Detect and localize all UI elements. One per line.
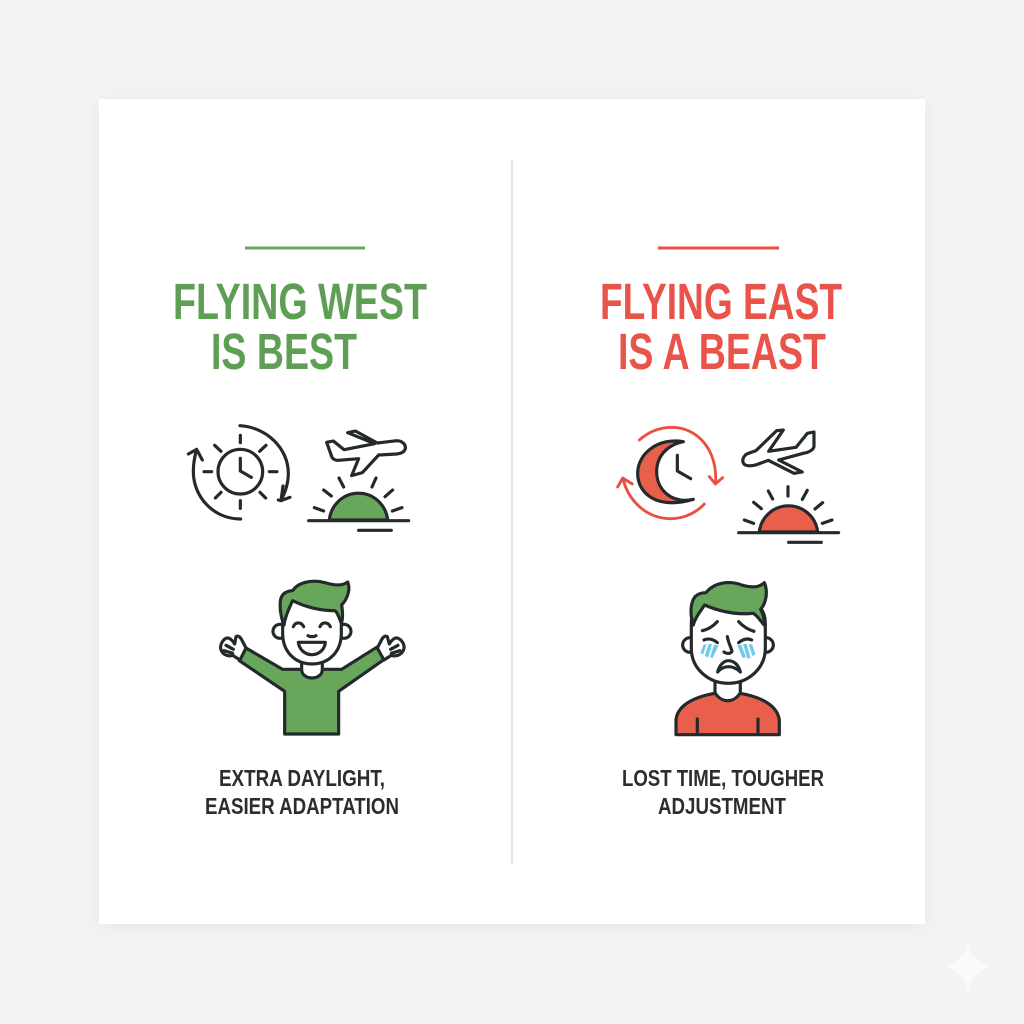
ears bbox=[683, 638, 697, 652]
red shirt bbox=[676, 693, 779, 735]
neck bbox=[715, 678, 740, 701]
hair bbox=[280, 581, 349, 625]
caption: extra daylight: EASIER ADAPTATION bbox=[205, 793, 399, 819]
caption: lost time bbox=[622, 765, 824, 819]
shirt and arms bbox=[239, 647, 384, 734]
card background bbox=[99, 99, 925, 924]
icon: red sun on horizon bbox=[739, 487, 839, 542]
frown bbox=[718, 661, 740, 672]
illustration: happy person with raised arms bbox=[221, 581, 404, 734]
panel: flying east bbox=[600, 246, 842, 819]
head bbox=[283, 593, 341, 664]
heading: flying east is a beast: FLYING EAST bbox=[600, 273, 842, 330]
red accent rule bbox=[658, 246, 779, 250]
icon: moon clock with red arrows bbox=[618, 427, 723, 519]
tears right bbox=[737, 644, 755, 659]
icon: plane heading east bbox=[743, 430, 814, 473]
icon: plane heading west bbox=[327, 431, 405, 476]
nose bbox=[724, 637, 732, 653]
left hand bbox=[221, 636, 246, 660]
green accent rule bbox=[245, 246, 365, 250]
open smile bbox=[298, 642, 325, 655]
illustration: crying person bbox=[676, 583, 779, 735]
smiling eyes bbox=[293, 623, 330, 627]
closed eyes bbox=[704, 639, 752, 643]
heading: flying west is best: IS BEST bbox=[211, 323, 357, 380]
sad brows bbox=[702, 622, 754, 631]
heading: flying east is a beast bbox=[600, 273, 842, 380]
head bbox=[691, 597, 765, 683]
heading: flying west is best: FLYING WEST bbox=[173, 273, 427, 330]
caption: extra daylight bbox=[205, 765, 399, 819]
heading: flying west is best bbox=[173, 273, 427, 380]
neck bbox=[302, 660, 322, 678]
icon: green sun on horizon bbox=[309, 478, 409, 530]
caption: extra daylight: EXTRA DAYLIGHT, bbox=[219, 765, 385, 791]
caption: lost time: ADJUSTMENT bbox=[658, 793, 786, 819]
hair bbox=[691, 583, 766, 625]
caption: lost time: LOST TIME, TOUGHER bbox=[622, 765, 824, 791]
right hand bbox=[377, 636, 404, 660]
tears left bbox=[700, 644, 719, 658]
panel: flying west bbox=[173, 246, 427, 819]
icon: clock with sun rays and rotating arrows bbox=[188, 426, 290, 519]
heading: flying east is a beast: IS A BEAST bbox=[618, 323, 826, 380]
nose bbox=[308, 631, 316, 641]
ears bbox=[273, 624, 287, 638]
icon: sparkle watermark bbox=[944, 943, 992, 992]
